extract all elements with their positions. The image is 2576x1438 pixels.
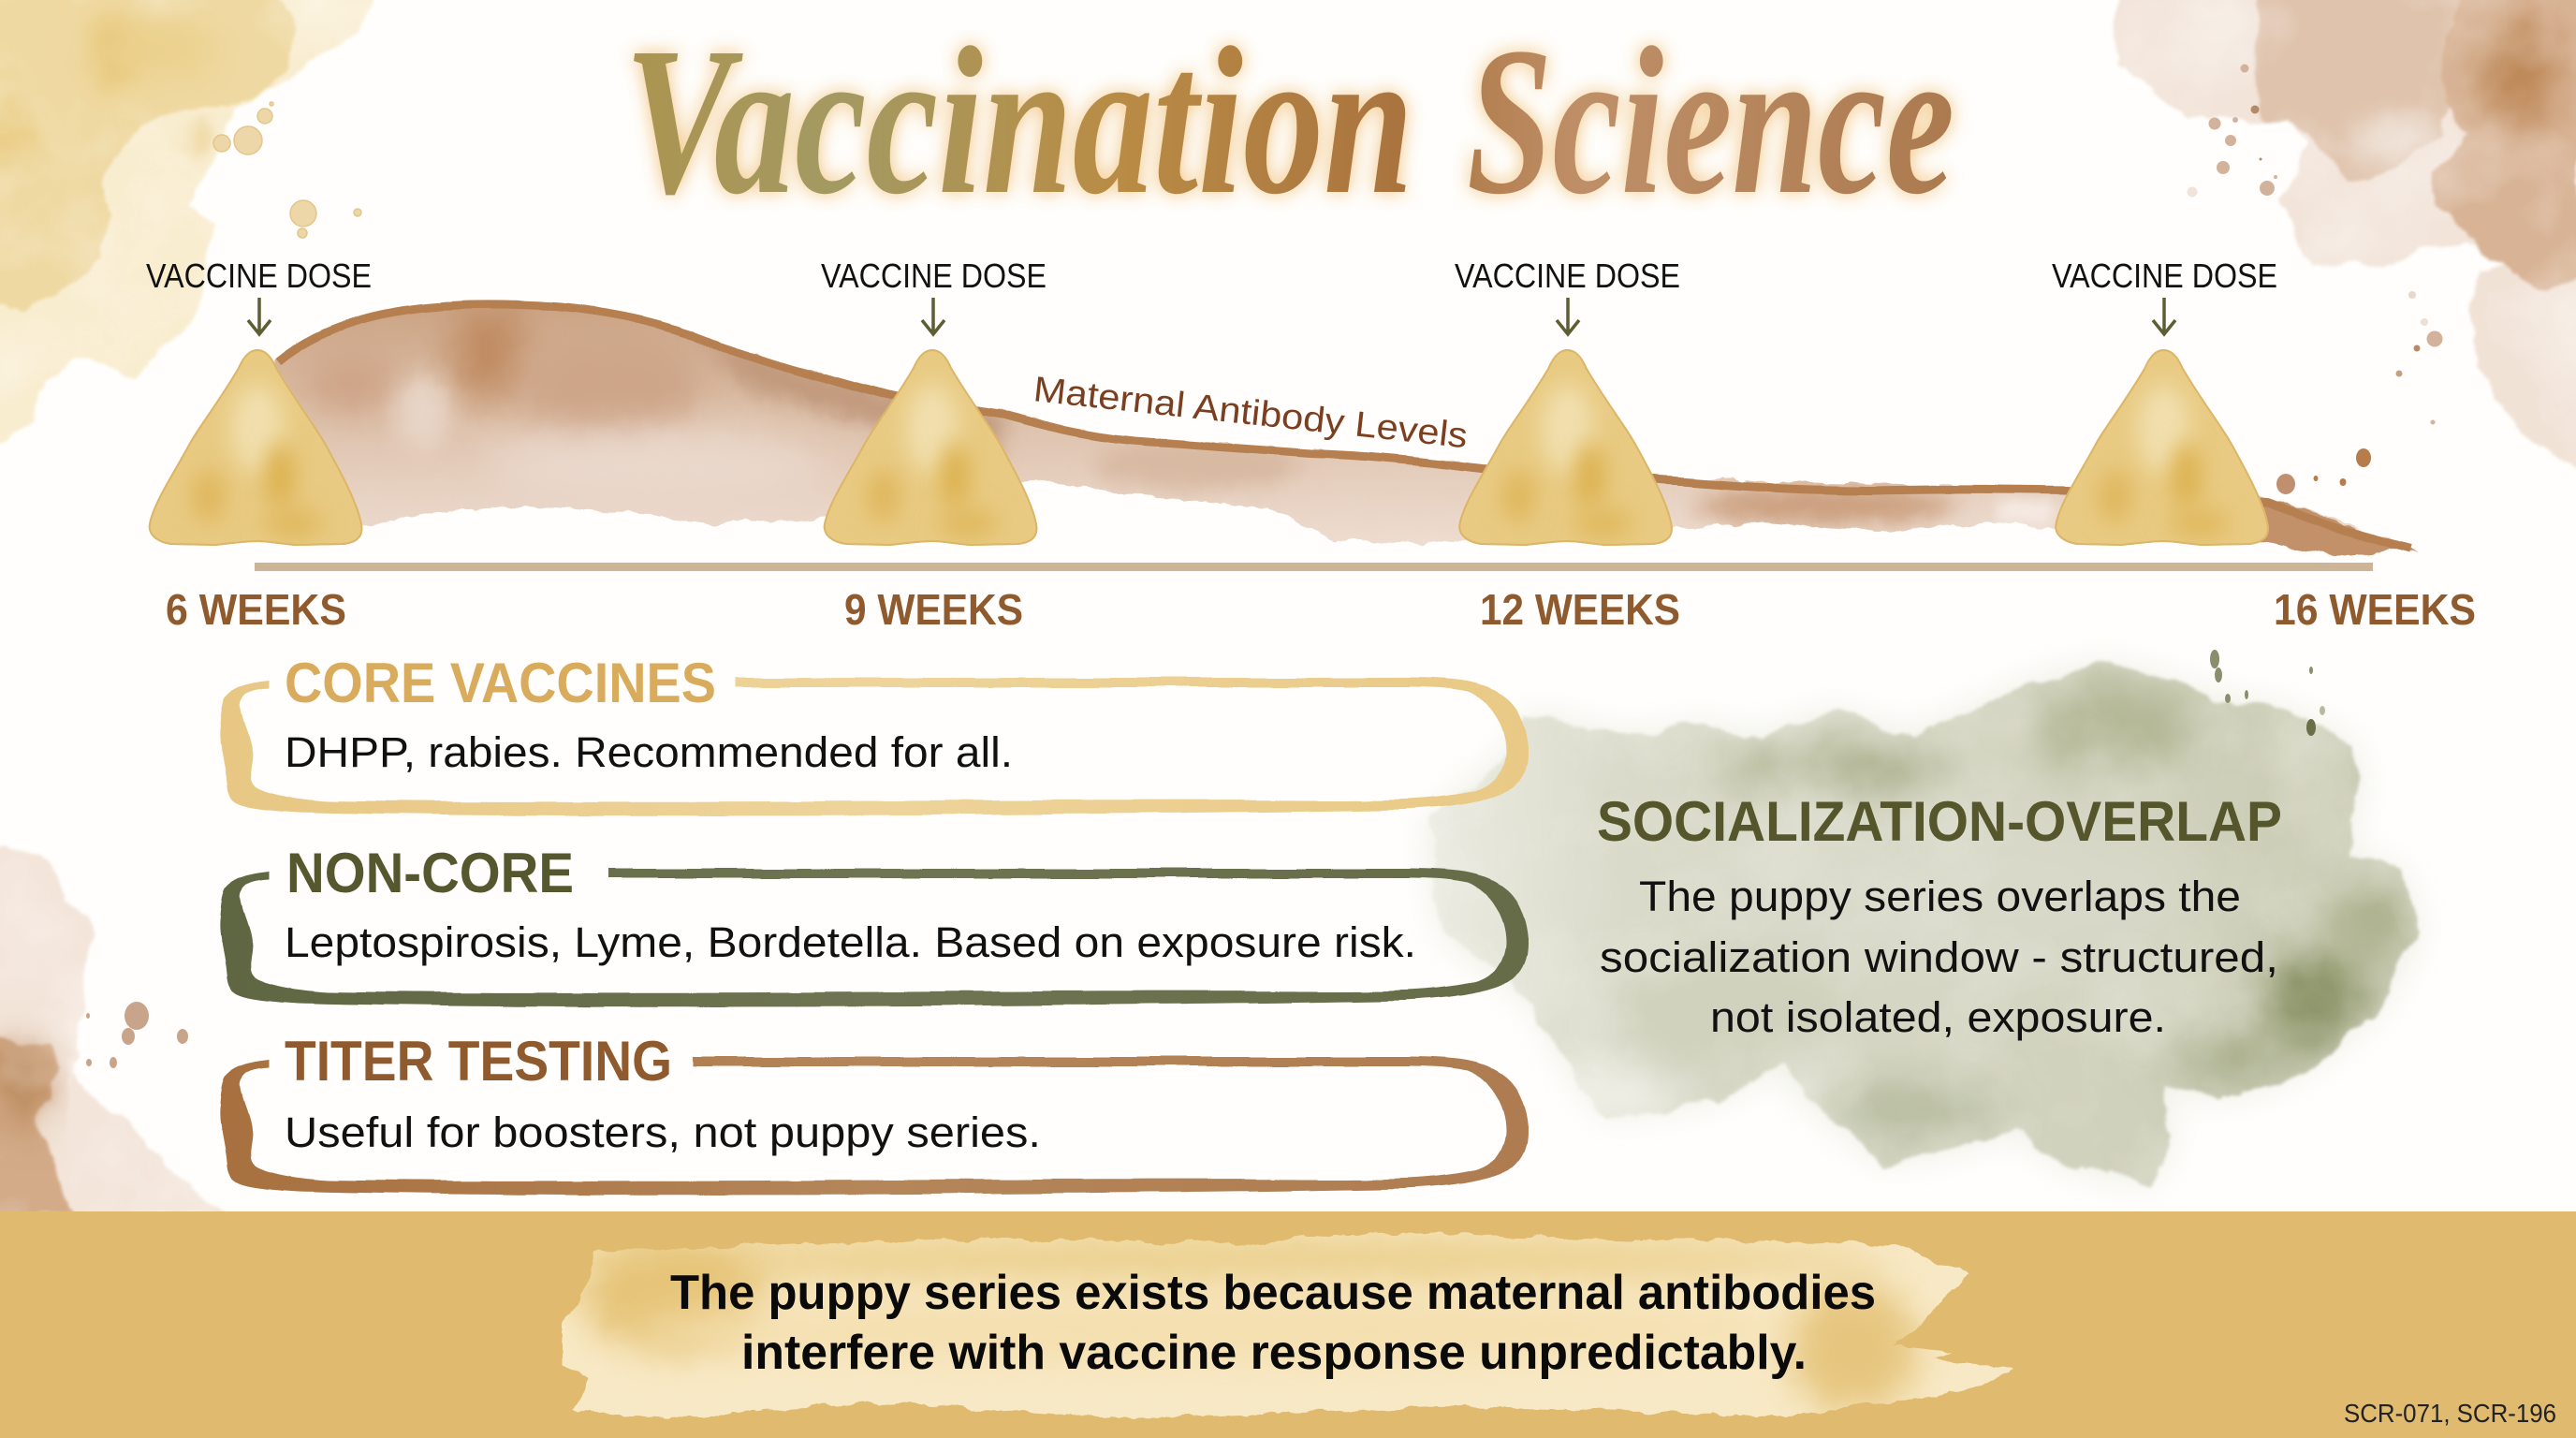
watercolor wash: top right brown [2117, 0, 2576, 475]
body text: The puppy series overlaps the [1639, 873, 2241, 920]
body text: DHPP, rabies. Recommended for all. [285, 728, 1013, 776]
panel: non-core [219, 842, 1528, 1006]
splatter dots: top right [2187, 64, 2443, 425]
heading: non-core: NON-CORE [286, 842, 574, 904]
chart: maternal antibody decline timeline [146, 257, 2476, 634]
footer band [0, 1211, 2576, 1438]
watercolor wash: top left yellow [0, 0, 393, 449]
watercolor wash: bottom left brown [0, 836, 224, 1217]
panel: socialization overlap [1427, 650, 2421, 1184]
source codes: SCR-071, SCR-196 [2344, 1399, 2556, 1428]
panel: core vaccines [219, 652, 1528, 815]
title: Science [1467, 4, 1954, 238]
marker: 9 weeks dose: 9 WEEKS [844, 585, 1023, 634]
marker: 9 weeks dose [821, 257, 1046, 634]
dark splatter near curve end [2276, 448, 2371, 494]
splatter dots: green [2210, 650, 2325, 736]
takeaway text [670, 1266, 1876, 1380]
marker: 16 weeks dose [2052, 257, 2476, 634]
curve top stroke [279, 304, 2410, 549]
marker: 6 weeks dose: 6 WEEKS [166, 585, 346, 634]
marker: 12 weeks dose: VACCINE DOSE [1455, 257, 1680, 295]
heading: core vaccines: CORE VACCINES [285, 652, 716, 714]
brush frame [219, 1057, 1528, 1195]
marker: 16 weeks dose: 16 WEEKS [2274, 585, 2476, 634]
marker: 16 weeks dose: VACCINE DOSE [2052, 257, 2277, 295]
marker: 6 weeks dose: VACCINE DOSE [146, 257, 372, 295]
body text: Leptospirosis, Lyme, Bordetella. Based on exposure risk. [285, 918, 1416, 966]
takeaway text: The puppy series exists because maternal antibodies [670, 1266, 1876, 1320]
torn paper takeaway [543, 1233, 2014, 1418]
heading: socialization-overlap: SOCIALIZATION-OVERLAP [1597, 790, 2282, 853]
brush frame [219, 869, 1528, 1006]
watercolor green blob [1427, 665, 2421, 1184]
title: Vaccination [624, 4, 1413, 238]
splatter dots: top left [213, 102, 361, 238]
brush frame [219, 678, 1528, 815]
takeaway text: interfere with vaccine response unpredictably. [741, 1326, 1807, 1380]
body text [1600, 873, 2278, 1041]
marker: 12 weeks dose [1455, 257, 1680, 634]
body text: not isolated, exposure. [1710, 993, 2166, 1041]
heading: titer testing: TITER TESTING [285, 1030, 672, 1093]
panel: titer testing [219, 1030, 1528, 1195]
maternal antibody level curve [276, 303, 2420, 562]
axis bar [255, 563, 2373, 571]
body text: socialization window - structured, [1600, 933, 2278, 981]
marker: 9 weeks dose: VACCINE DOSE [821, 257, 1046, 295]
splatter dots: bottom left [86, 1002, 188, 1068]
marker: 12 weeks dose: 12 WEEKS [1480, 585, 1680, 634]
marker: 6 weeks dose [146, 257, 372, 634]
label: maternal antibody levels: Maternal Antibody Levels [1032, 370, 1470, 456]
body text: Useful for boosters, not puppy series. [285, 1108, 1041, 1156]
